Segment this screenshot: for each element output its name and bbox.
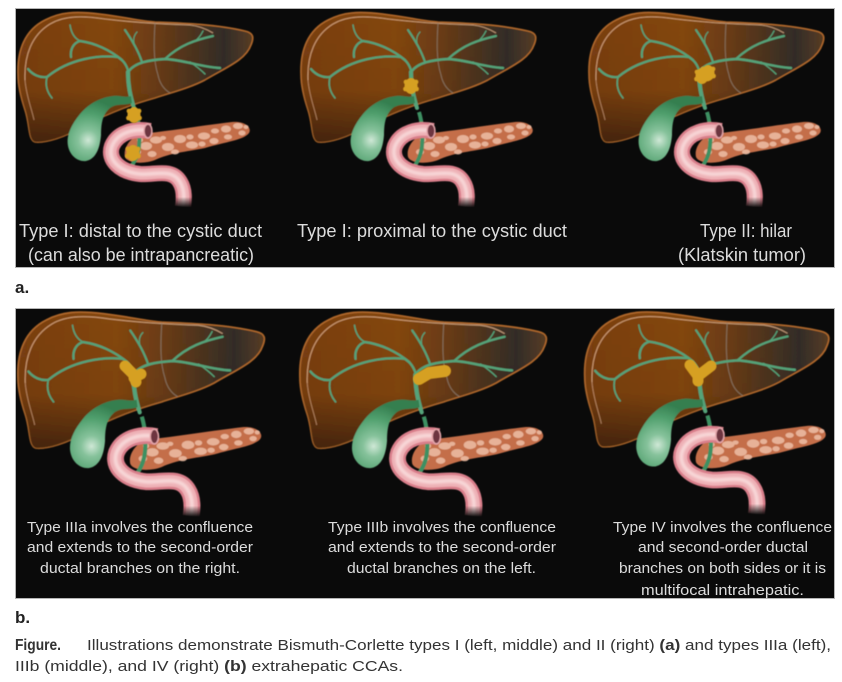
label: Type II: Type II: hilar bbox=[700, 221, 792, 241]
label: Type IV: multifocal intrahepatic. bbox=[641, 582, 804, 599]
label: Type IIIa bbox=[27, 519, 253, 577]
panel letter b: b. bbox=[15, 608, 30, 627]
figure caption: Illustrations demonstrate Bismuth-Corlette types I (left, middle) and II (right) (a) and types IIIa (left), bbox=[87, 638, 831, 654]
label: Type II bbox=[678, 221, 806, 265]
label: Type IV: branches on both sides or it is bbox=[619, 560, 826, 577]
tumor: distal and intrapancreatic bbox=[125, 107, 142, 161]
label: Type IV: and second-order ductal bbox=[638, 539, 808, 556]
label: Type IIIa: Type IIIa involves the confluence bbox=[27, 519, 253, 536]
label: Type IIIb bbox=[328, 519, 556, 577]
label: Type IIIb: and extends to the second-order bbox=[328, 539, 556, 556]
panel letter a: a. bbox=[15, 278, 29, 297]
tumor: hilar bbox=[694, 65, 716, 84]
illustration: Type II hilar bbox=[589, 12, 824, 212]
illustration: Type I distal bbox=[18, 12, 253, 212]
label: Type IIIb: Type IIIb involves the confluence bbox=[328, 519, 556, 536]
figure caption: Figure. bbox=[15, 637, 61, 654]
label: Type I distal: Type I: distal to the cystic duct bbox=[19, 221, 262, 241]
illustration: Type IIIa bbox=[18, 312, 264, 522]
figure caption: IIIb (middle), and IV (right) (b) extrahepatic CCAs. bbox=[15, 659, 403, 675]
panel: a bbox=[16, 8, 834, 268]
tumor: right confluence bbox=[125, 366, 141, 382]
label: Type I distal bbox=[19, 221, 262, 265]
label: Type IIIb: ductal branches on the left. bbox=[347, 560, 536, 577]
panel: b bbox=[16, 308, 834, 599]
illustration: Type I proximal bbox=[301, 12, 536, 212]
illustration: Type IV bbox=[585, 312, 829, 519]
label: Type IV bbox=[613, 519, 832, 599]
label: Type I distal: (can also be intrapancreatic) bbox=[28, 245, 254, 265]
tumor: both sides bbox=[690, 365, 711, 381]
tumor: proximal bbox=[403, 78, 419, 94]
illustration: Type IIIb bbox=[300, 312, 546, 522]
label: Type II: (Klatskin tumor) bbox=[678, 245, 806, 265]
label: Type IIIa: ductal branches on the right. bbox=[40, 560, 240, 577]
label: Type IV: Type IV involves the confluence bbox=[613, 519, 832, 536]
label: Type IIIa: and extends to the second-order bbox=[27, 539, 253, 556]
figure caption bbox=[15, 637, 831, 675]
label: Type I proximal: Type I: proximal to the cystic duct bbox=[297, 221, 567, 241]
tumor: left confluence bbox=[419, 371, 445, 379]
